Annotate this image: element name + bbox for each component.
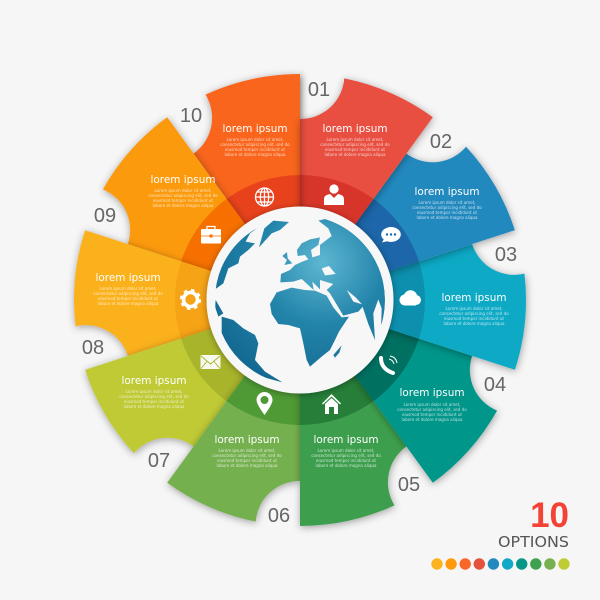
option 01 content [308, 79, 390, 205]
text 04: Lorem ipsum dolor sit amet, [403, 402, 461, 407]
panel: segment 09 [89, 105, 341, 300]
option 02 content [381, 131, 482, 242]
text 03 [439, 306, 509, 326]
number 09: 09 [94, 205, 116, 227]
number 02: 02 [430, 131, 452, 153]
legend count: 10 [530, 496, 569, 535]
heading 08: lorem ipsum [96, 272, 160, 284]
panel: segment 02 [300, 121, 538, 378]
option 04 content [381, 356, 506, 422]
text 06: consectetur adipiscing elit, sed do [212, 453, 282, 458]
number 01: 01 [308, 79, 330, 101]
text 06: eiusmod tempor incididunt ut [217, 458, 277, 463]
heading 03: lorem ipsum [442, 292, 506, 304]
text 08 [93, 286, 163, 306]
text 10: consectetur adipiscing elit, sed do [220, 142, 290, 147]
text 09 [148, 188, 218, 208]
panel: segment 01 [300, 78, 433, 300]
panel: segment 08 [48, 174, 300, 368]
text 06 [212, 448, 282, 468]
text 02: Lorem ipsum dolor sit amet, [418, 200, 476, 205]
text 05: labore et dolore magna aliqua [315, 463, 377, 468]
heading 09: lorem ipsum [150, 174, 216, 186]
text 04: labore et dolore magna aliqua [401, 417, 463, 422]
legend label: OPTIONS [498, 533, 569, 551]
text 05 [311, 448, 381, 468]
icon: chat bubble [381, 227, 401, 242]
number 03: 03 [495, 244, 517, 266]
icon: cloud [400, 290, 421, 306]
icon: map pin [256, 392, 272, 415]
panel: segment 04 [259, 300, 511, 495]
text 01 [320, 137, 390, 157]
option 08 content [82, 272, 200, 359]
text 07: eiusmod tempor incididunt ut [124, 399, 184, 404]
text 09: consectetur adipiscing elit, sed do [148, 193, 218, 198]
text 03: Lorem ipsum dolor sit amet, [445, 306, 503, 311]
panel: segment 10 [170, 43, 407, 300]
text 08: labore et dolore magna aliqua [97, 301, 159, 306]
text 05: Lorem ipsum dolor sit amet, [317, 448, 375, 453]
panel: segment 03 [300, 232, 552, 426]
globe [206, 206, 394, 394]
text 03: consectetur adipiscing elit, sed do [439, 311, 509, 316]
globe continents [215, 219, 385, 382]
shadow of segment 10 falling on segment 01 [300, 72, 306, 206]
heading 04: lorem ipsum [400, 387, 464, 399]
text 02 [412, 200, 482, 220]
number 10: 10 [180, 105, 202, 127]
text 10: labore et dolore magna aliqua [224, 152, 286, 157]
text 05: eiusmod tempor incididunt ut [316, 458, 376, 463]
text 03: labore et dolore magna aliqua [443, 321, 505, 326]
option 09 content [94, 174, 221, 244]
text 08: eiusmod tempor incididunt ut [98, 296, 158, 301]
text 04: eiusmod tempor incididunt ut [402, 412, 462, 417]
text 10 [220, 137, 290, 157]
option 07 content [119, 355, 220, 472]
text 02: labore et dolore magna aliqua [416, 215, 478, 220]
text 07 [119, 389, 189, 409]
heading 05: lorem ipsum [314, 434, 378, 446]
text 01: consectetur adipiscing elit, sed do [320, 142, 390, 147]
text 06: labore et dolore magna aliqua [216, 463, 278, 468]
heading 01: lorem ipsum [322, 123, 388, 135]
number 08: 08 [82, 337, 104, 359]
icon: web globe [256, 188, 274, 206]
option 05 content [311, 394, 420, 496]
text 07: consectetur adipiscing elit, sed do [119, 394, 189, 399]
icon: phone [381, 356, 397, 373]
number 04: 04 [484, 374, 506, 396]
text 09: eiusmod tempor incididunt ut [153, 198, 213, 203]
option 03 content [400, 244, 517, 326]
text 06: Lorem ipsum dolor sit amet, [218, 448, 276, 453]
text 01: labore et dolore magna aliqua [324, 152, 386, 157]
heading 07: lorem ipsum [122, 375, 186, 387]
wheel segments [70, 70, 532, 532]
text 10: eiusmod tempor incididunt ut [225, 147, 285, 152]
text 02: eiusmod tempor incididunt ut [417, 210, 477, 215]
icon: person [324, 184, 344, 205]
text 02: consectetur adipiscing elit, sed do [412, 205, 482, 210]
icon: gear [181, 290, 200, 309]
globe white disc [206, 206, 394, 394]
text 08: Lorem ipsum dolor sit amet, [99, 286, 157, 291]
icon: briefcase [201, 226, 221, 244]
text 09: Lorem ipsum dolor sit amet, [154, 188, 212, 193]
heading 06: lorem ipsum [214, 434, 280, 446]
text 04: consectetur adipiscing elit, sed do [397, 407, 467, 412]
heading 10: lorem ipsum [222, 123, 288, 135]
option 06 content [212, 392, 290, 527]
option 10 content [180, 105, 290, 206]
text 07: labore et dolore magna aliqua [123, 404, 185, 409]
icon: house [322, 394, 341, 414]
text 01: eiusmod tempor incididunt ut [325, 147, 385, 152]
legend colour dots [431, 558, 570, 570]
text 07: Lorem ipsum dolor sit amet, [125, 389, 183, 394]
text 04 [397, 402, 467, 422]
text 01: Lorem ipsum dolor sit amet, [326, 137, 384, 142]
text 03: eiusmod tempor incididunt ut [444, 316, 504, 321]
icon: envelope [200, 355, 220, 369]
legend [431, 496, 570, 570]
text 05: consectetur adipiscing elit, sed do [311, 453, 381, 458]
number 05: 05 [398, 474, 420, 496]
number 07: 07 [148, 450, 170, 472]
panel: segment 07 [62, 222, 300, 479]
text 08: consectetur adipiscing elit, sed do [93, 291, 163, 296]
panel: segment 05 [193, 300, 430, 557]
panel: segment 06 [167, 300, 300, 522]
text 09: labore et dolore magna aliqua [152, 203, 214, 208]
number 06: 06 [268, 505, 290, 527]
text 10: Lorem ipsum dolor sit amet, [226, 137, 284, 142]
heading 02: lorem ipsum [414, 186, 480, 198]
